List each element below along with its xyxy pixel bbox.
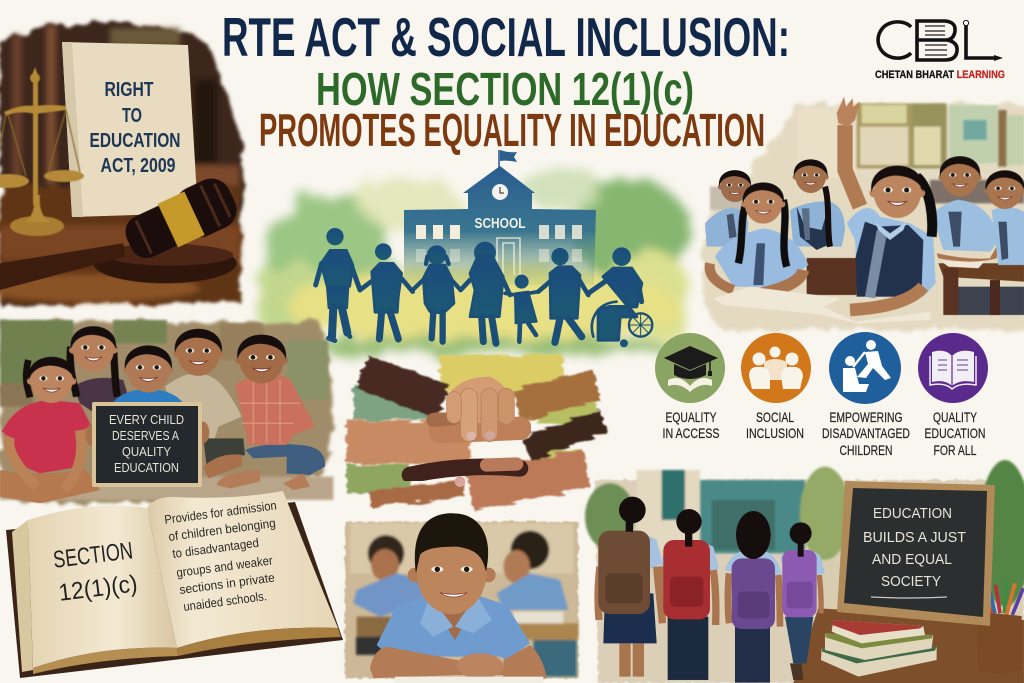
- student with pink-purple backpack: [780, 522, 825, 680]
- icon: empowering disadvantaged children: [829, 332, 901, 404]
- hands holding board: [85, 424, 100, 446]
- stack of books: [821, 620, 937, 677]
- chalkboard: education builds: [837, 481, 995, 626]
- child 3: [413, 245, 461, 342]
- silhouettes of children: [316, 228, 652, 347]
- icon labels: EMPOWERING: [830, 409, 902, 425]
- child 5: [505, 275, 538, 342]
- book title: TO: [122, 105, 142, 127]
- child 4: [461, 242, 510, 343]
- boy far right: [984, 170, 1024, 265]
- title: HOW SECTION 12(1)(c): [316, 63, 694, 115]
- theme icons: [655, 332, 988, 458]
- icon labels: EQUALITY: [666, 409, 717, 425]
- book title: EDUCATION: [90, 130, 180, 152]
- right page description: [164, 498, 277, 614]
- boy right: [932, 156, 1000, 262]
- school building: [404, 150, 596, 285]
- book title: ACT, 2009: [100, 155, 176, 177]
- title: [222, 6, 790, 156]
- scene: students walking to school: [585, 460, 1024, 683]
- icon labels: EDUCATION: [924, 425, 986, 441]
- desks: [805, 251, 1024, 315]
- girl at left desk: [710, 182, 808, 295]
- chalkboard: every child: EVERY CHILD: [109, 412, 184, 427]
- book title: RIGHT: [104, 79, 154, 101]
- student with purple backpack: [725, 511, 782, 683]
- icon labels: IN ACCESS: [662, 425, 720, 441]
- balance scales: [0, 67, 84, 236]
- right page description: sections in private: [179, 571, 276, 597]
- icon labels: CHILDREN: [840, 442, 892, 458]
- scene: classroom with children raising hands: [702, 97, 1024, 330]
- scene: smiling boy at desk: [345, 513, 578, 683]
- school label: SCHOOL: [474, 216, 526, 232]
- wooden table: [793, 608, 1024, 683]
- scene: law book, scales and gavel: [0, 24, 246, 306]
- logo wordmark: CHETAN BHARAT LEARNING: [875, 69, 1005, 81]
- icon labels: SOCIAL: [756, 409, 794, 425]
- icon labels: QUALITY: [933, 409, 977, 425]
- scene: children with chalkboard: [0, 320, 333, 503]
- icon labels: DISADVANTAGED: [822, 425, 910, 441]
- school clock: [492, 184, 508, 200]
- icon: quality education for all: [918, 333, 988, 403]
- child 6: [538, 248, 588, 342]
- pencil cup: [972, 580, 1023, 673]
- gavel: [0, 172, 243, 290]
- chalkboard: every child: [92, 402, 202, 487]
- student with brown backpack: [598, 497, 662, 677]
- child in wheelchair: [588, 247, 652, 347]
- right page description: unaided schools.: [183, 589, 268, 614]
- boy in orange plaid: [217, 335, 325, 490]
- icon: social inclusion: [741, 333, 811, 403]
- chalkboard: every child: QUALITY: [122, 444, 171, 459]
- girl raising hand: [837, 97, 936, 310]
- logo: Chetan Bharat Learning: [875, 20, 1005, 81]
- icon: equality in access: [655, 333, 725, 403]
- law book: [62, 42, 198, 217]
- left page heading: 12(1)(c): [57, 570, 139, 607]
- right page description: to disadvantaged: [172, 536, 260, 561]
- chalkboard: every child: EDUCATION: [114, 460, 179, 475]
- book title: [90, 79, 180, 177]
- chalkboard: education builds: EDUCATION: [873, 505, 952, 522]
- chalkboard: education builds: BUILDS A JUST: [863, 529, 966, 546]
- child 2: [360, 243, 413, 339]
- girl in red dress: [0, 357, 100, 503]
- chalkboard: every child: DESERVES A: [112, 428, 179, 443]
- boy in beige shirt: [165, 329, 245, 478]
- back row: student far left: [705, 170, 752, 247]
- right page description: groups and weaker: [176, 553, 274, 580]
- open books on desk: [713, 287, 932, 323]
- right page description: of children belonging: [168, 516, 277, 544]
- left page heading: SECTION: [52, 537, 134, 574]
- right page description: Provides for admission: [164, 498, 277, 527]
- chalkboard: education builds: SOCIETY: [881, 573, 941, 590]
- girl in dark top: [69, 326, 128, 417]
- child 1: [316, 228, 360, 341]
- scene: children holding hands in front of school: [257, 150, 690, 354]
- left page heading: [52, 537, 139, 607]
- icon labels: [662, 409, 986, 458]
- icon labels: FOR ALL: [934, 442, 977, 458]
- scene: hands stacked together: [347, 355, 603, 499]
- open book: section 12(1)(c): [6, 491, 343, 678]
- classroom posters: [710, 103, 1024, 210]
- back row: girl in vest: [790, 159, 845, 250]
- boy in blue shirt: [113, 345, 183, 410]
- chalkboard: education builds: AND EQUAL: [872, 551, 952, 568]
- icon labels: INCLUSION: [746, 425, 804, 441]
- student with red backpack: [661, 509, 719, 680]
